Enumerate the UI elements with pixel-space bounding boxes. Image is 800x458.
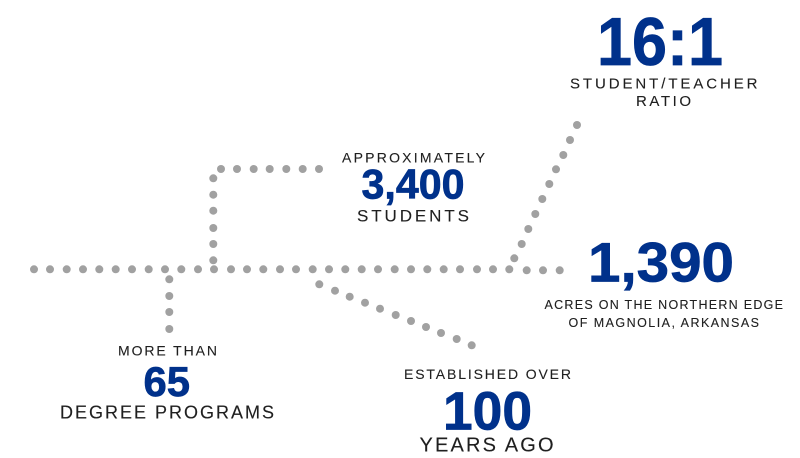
label: more than: MORE THAN [118,342,217,358]
number: 65: 65 [144,358,190,405]
number: 3,400: 3,400 [362,161,464,208]
stat: approximately 3,400 students [342,149,486,226]
number: 1,390: 1,390 [588,230,734,293]
number: 100: 100 [443,381,532,441]
dotted line: branch to established [315,280,476,349]
label: years ago: YEARS AGO [420,435,554,457]
stat: 1,390 acres [544,230,783,330]
number: 16:1: 16:1 [597,4,723,80]
dotted line: branch to degree programs [165,275,173,333]
label: student/teacher: STUDENT/TEACHER [570,75,758,92]
dotted line: branch to students [209,165,323,264]
label: degree programs: DEGREE PROGRAMS [60,403,274,423]
label: established over: ESTABLISHED OVER [404,366,571,382]
label: of Magnolia, Arkansas: OF MAGNOLIA, ARKANSAS [568,316,759,330]
stat: 16:1 student/teacher ratio [570,4,758,110]
dotted line: main horizontal [30,265,564,274]
stat: established over 100 years ago [404,366,571,457]
label: ratio: RATIO [636,93,691,110]
label: acres on the northern edge: ACRES ON THE NORTHERN EDGE [544,298,783,312]
label: approximately: APPROXIMATELY [342,149,486,165]
dotted line: branch to student/teacher ratio [510,121,581,262]
stat: more than 65 degree programs [60,342,274,423]
label: students: STUDENTS [357,207,469,226]
